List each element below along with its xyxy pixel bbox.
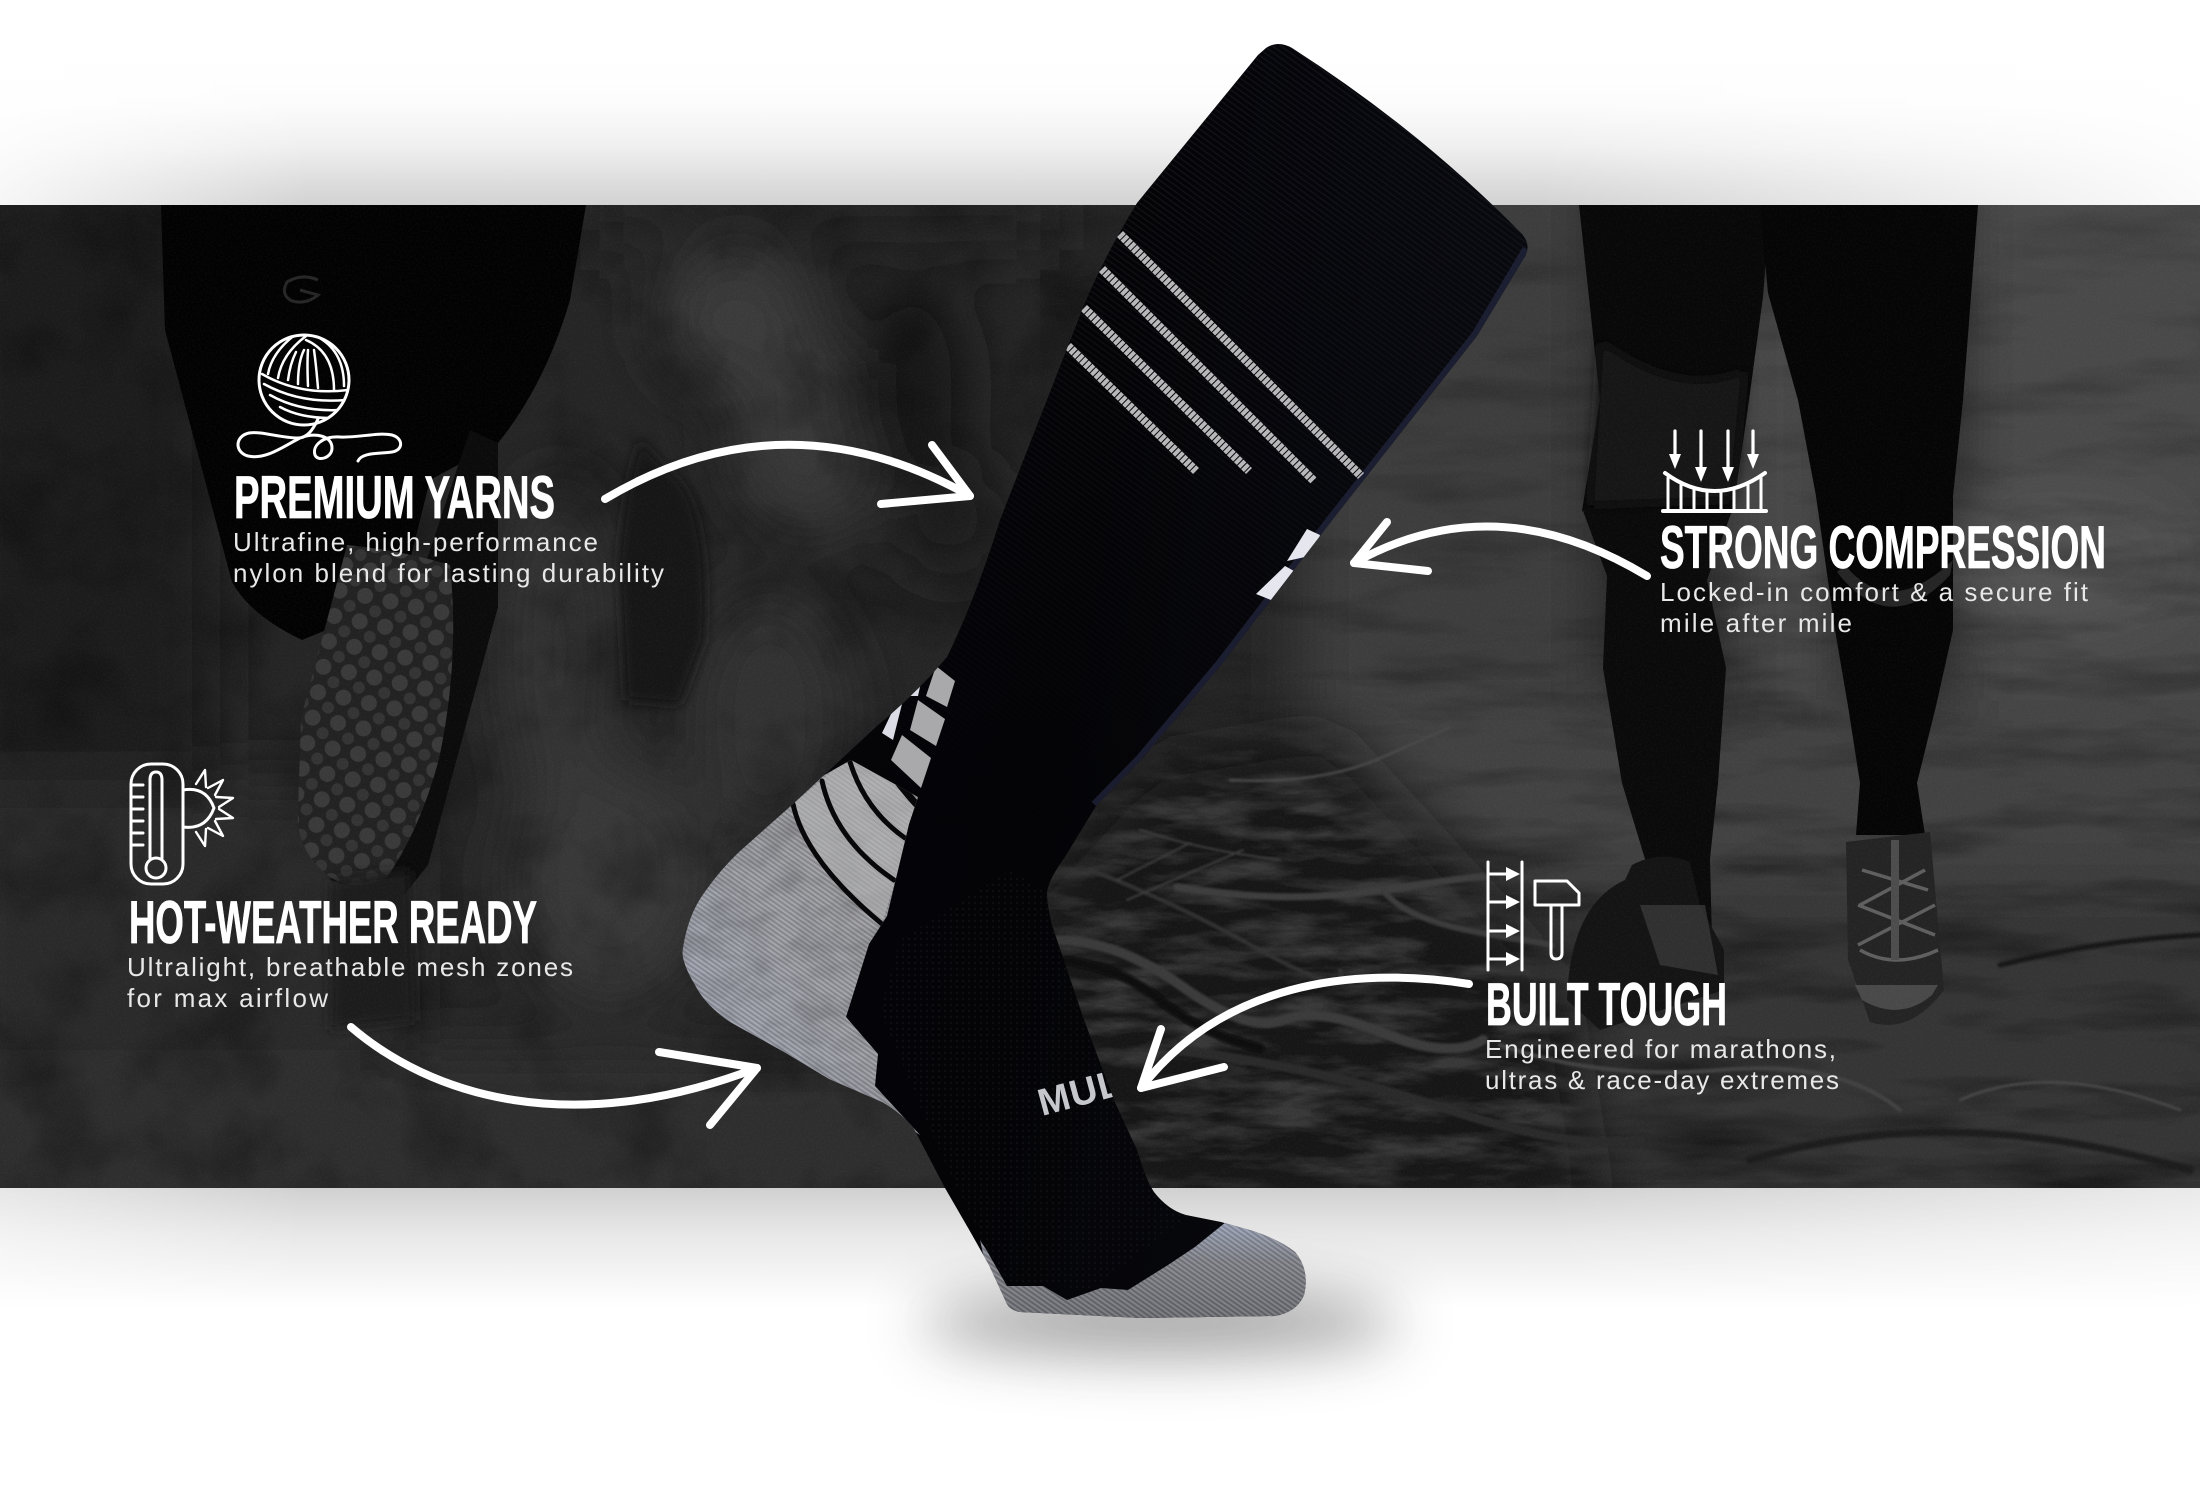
icon: impact wall and hammer [1488,862,1579,970]
feature: premium yarns [233,334,664,588]
left background tone [0,205,1001,1188]
description: premium yarns: Ultrafine, high-performance [233,527,598,557]
shorts logo [284,277,318,302]
description: hot-weather ready: for max airflow [127,983,328,1013]
toe cap [980,1222,1320,1330]
left runner leg [330,430,498,900]
top shadow above the photo band [0,60,2200,206]
description: hot-weather ready: Ultralight, breathable mesh zones [127,952,573,982]
heel cushion [650,738,940,1150]
heading: premium yarns: PREMIUM YARNS [234,464,555,531]
left runner shoe sole [298,545,453,886]
heel lighter ribbed zone [793,755,920,924]
heading: hot-weather ready: HOT-WEATHER READY [129,889,537,956]
sock ribbing [900,30,1560,930]
sock logo: MUL [1033,1062,1127,1125]
product: black compression sock [650,30,1560,1330]
description: strong compression: Locked-in comfort & a secure fit [1660,577,2089,607]
sock edge highlight [1096,250,1528,806]
left runner shorts [161,205,586,640]
description: premium yarns: nylon blend for lasting durability [233,558,664,588]
right runner shorts and legs [1579,205,1978,940]
ground streak texture [1299,224,2200,1188]
description: built tough: Engineered for marathons, [1485,1034,1836,1064]
arrow: hot-weather ready [351,1027,757,1125]
right ground tone [1300,150,2200,1210]
calf stripes [1068,234,1361,481]
ankle white bar [882,655,927,740]
icon: thermometer and sun [131,764,233,884]
exposed tree roots [1057,727,2200,1170]
heading: built tough: BUILT TOUGH [1486,971,1727,1038]
description: built tough: ultras & race-day extremes [1485,1065,1839,1095]
bottom shadow below the photo band [0,1187,2200,1307]
photo grain [0,205,2200,1188]
root bed texture [1047,734,1588,1188]
floor shadow beneath the sock [920,1290,1400,1354]
description: strong compression: mile after mile [1660,608,1852,638]
sock lower mesh [880,870,1190,1290]
icon: yarn ball [238,334,401,461]
left runner lower foot [330,870,415,1030]
feature: built tough [1485,862,1839,1095]
root bed dark shape [1000,730,1600,1220]
icon: compression arrows over bridge [1663,431,1766,511]
right runner shoes [1567,832,1944,1030]
heel curved black stripes [793,738,918,924]
arrow: built tough [1141,978,1469,1088]
photo band: trail runners background [0,205,2200,1188]
arrow: premium yarns [605,445,970,504]
left background blotches [0,292,1082,1188]
arrow: strong compression [1354,522,1647,576]
heel mottled tone [650,750,940,1150]
ladder squares [926,666,955,707]
feature: strong compression [1660,431,2106,638]
feature: hot-weather ready [127,764,573,1013]
distant runner [618,440,706,705]
side compression bars [1287,529,1320,561]
